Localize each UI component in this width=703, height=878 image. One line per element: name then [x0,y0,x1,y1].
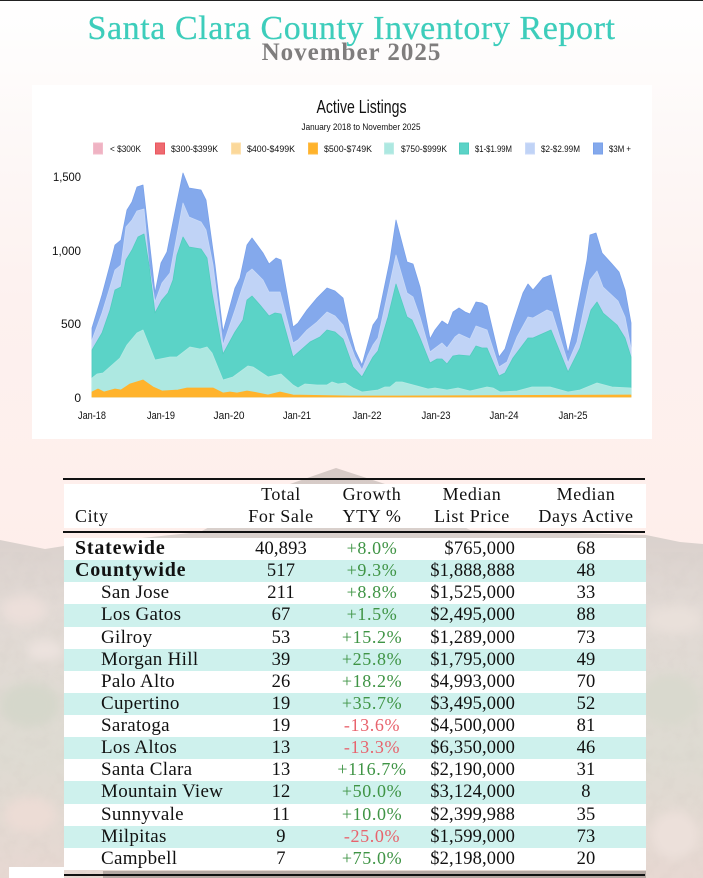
x axis labels: Jan-24 [490,410,518,422]
area: $500-749K [92,380,631,397]
row: Campbell: +75.0% [342,848,402,868]
table header: Total [261,484,301,504]
area: $3M+ [92,173,631,397]
row: Mountain View: 8 [581,782,591,802]
row: Palo Alto: 26 [272,672,290,692]
row: Palo Alto: +18.2% [342,671,402,691]
x axis labels: Jan-19 [147,410,175,422]
row: Los Altos: Los Altos [101,737,177,758]
row: Morgan Hill: Morgan Hill [101,649,198,670]
row: Mountain View: Mountain View [101,781,223,802]
row: Statewide [64,538,646,560]
legend [94,143,631,155]
row: Morgan Hill: 39 [272,650,290,670]
area: $750-999K [92,330,631,397]
row: Statewide: +8.0% [347,538,397,558]
row: Gilroy: +15.2% [342,626,402,646]
row: Milpitas: 73 [577,827,595,847]
y axis labels: 1,000 [52,244,81,258]
row: Sunnyvale: $2,399,988 [430,804,515,824]
row: Morgan Hill: 49 [577,650,595,670]
row: Campbell: Campbell [101,848,177,869]
row: Santa Clara: Santa Clara [101,759,192,780]
row: Santa Clara: $2,190,000 [430,760,515,780]
subtitle: date: November 2025 [262,39,441,66]
legend: $1-$1.99M [475,144,512,155]
row: Santa Clara [64,759,646,781]
row: Sunnyvale: +10.0% [342,804,402,824]
row: San Jose: 211 [267,583,295,603]
legend: $3M + [609,144,631,155]
title: Santa Clara County Inventory Report [88,10,615,47]
x axis labels: Jan-18 [78,410,106,422]
row: Los Gatos: 88 [577,605,595,625]
row: Palo Alto [64,671,646,693]
table header: Median [557,484,615,504]
row: Los Gatos: +1.5% [347,604,397,624]
row: Cupertino: Cupertino [101,693,180,714]
row: Gilroy: $1,289,000 [430,628,515,648]
row: Cupertino [64,693,646,715]
row: Morgan Hill: +25.8% [342,649,402,669]
row: Los Altos: 13 [272,738,290,758]
legend: $400-$499K [247,144,296,155]
area: $2-2.99M [92,203,631,397]
row: Los Gatos [64,604,646,626]
row: Los Altos [64,737,646,759]
x axis labels: Jan-22 [352,410,382,422]
row: San Jose: +8.8% [347,582,397,602]
row: Cupertino: 52 [577,694,595,714]
row: San Jose [64,582,646,604]
legend: < $300K [110,144,142,155]
x axis labels: Jan-20 [214,410,244,422]
row: Countywide: +9.3% [347,560,397,580]
row: Milpitas: -25.0% [344,826,400,846]
row: Cupertino: $3,495,000 [430,694,515,714]
legend: $500-$749K [324,144,373,155]
row: Sunnyvale [64,804,646,826]
row: Countywide: $1,888,888 [430,561,515,581]
row: Milpitas [64,826,646,848]
table header: Median [443,484,501,504]
area: $1-1.99M [92,234,631,397]
row: Milpitas: Milpitas [101,826,167,847]
table header: City [75,506,108,526]
x axis labels: Jan-23 [422,410,450,422]
y axis labels: 1,500 [53,170,81,184]
row: Gilroy [64,626,646,649]
row: Sunnyvale: Sunnyvale [101,804,184,824]
table header: For Sale [248,506,314,526]
row: Sunnyvale: 11 [272,804,290,824]
stacked area chart [92,173,631,397]
row: Statewide: Statewide [75,537,166,559]
row: Los Gatos: $2,495,000 [430,605,515,625]
row: Saratoga: -13.6% [344,715,400,735]
row: Saratoga: 19 [272,716,290,736]
row: Los Gatos: Los Gatos [101,604,181,625]
row: Sunnyvale: 35 [577,804,595,824]
row: Santa Clara: 13 [272,760,290,780]
row: Cupertino: +35.7% [342,693,402,713]
row: Statewide: 68 [577,539,595,559]
table: city inventory [63,478,646,876]
table rows [64,537,646,870]
row: Campbell: 7 [276,849,286,869]
table header: List Price [434,506,510,526]
chart title: Active Listings [316,97,406,117]
row: Los Altos: $6,350,000 [430,738,515,758]
y axis labels: 500 [61,317,81,331]
row: Countywide: 48 [577,561,595,581]
row: Countywide: 517 [267,561,295,581]
chart subtitle: January 2018 to November 2025 [302,122,420,133]
row: Mountain View [64,781,646,804]
table header: Days Active [538,506,634,526]
row: Campbell [64,848,646,870]
row: Santa Clara: +116.7% [337,759,407,779]
row: Mountain View: 12 [272,782,290,802]
row: San Jose: $1,525,000 [430,583,515,603]
legend: $2-$2.99M [541,144,580,155]
row: Statewide: 40,893 [255,539,307,559]
table header: Growth [343,484,401,504]
table header [64,484,646,528]
row: Los Altos: 46 [577,738,595,758]
row: Palo Alto: 70 [577,672,595,692]
row: Mountain View: +50.0% [342,781,402,801]
row: Campbell: 20 [577,849,595,869]
row: Countywide [64,560,646,582]
row: Milpitas: 9 [276,827,286,847]
row: San Jose: 33 [577,583,595,603]
row: San Jose: San Jose [101,582,169,603]
x axis labels: Jan-21 [283,410,311,422]
legend: $300-$399K [171,144,219,155]
x axis labels [78,410,588,422]
row: Gilroy: 73 [577,628,595,648]
table header: YTY % [343,506,401,526]
row: Palo Alto: $4,993,000 [430,672,515,692]
row: Statewide: $765,000 [444,539,515,559]
row: Saratoga [64,715,646,737]
row: Saratoga: Saratoga [101,715,170,736]
y axis labels [52,170,81,405]
y axis labels: 0 [74,391,81,405]
row: Morgan Hill: $1,795,000 [430,650,515,670]
row: Saratoga: 81 [577,716,595,736]
row: Saratoga: $4,500,000 [430,716,515,736]
x axis labels: Jan-25 [558,410,588,422]
row: Countywide: Countywide [75,559,186,581]
row: Gilroy: Gilroy [101,626,152,648]
row: Mountain View: $3,124,000 [430,782,515,802]
row: Gilroy: 53 [272,628,290,648]
legend: $750-$999K [401,144,448,155]
row: Morgan Hill [64,649,646,671]
row: Los Altos: -13.3% [344,737,400,757]
row: Campbell: $2,198,000 [430,849,515,869]
row: Los Gatos: 67 [272,605,290,625]
row: Santa Clara: 31 [577,760,595,780]
row: Palo Alto: Palo Alto [101,671,175,692]
row: Cupertino: 19 [272,694,290,714]
row: Milpitas: $1,599,000 [430,827,515,847]
